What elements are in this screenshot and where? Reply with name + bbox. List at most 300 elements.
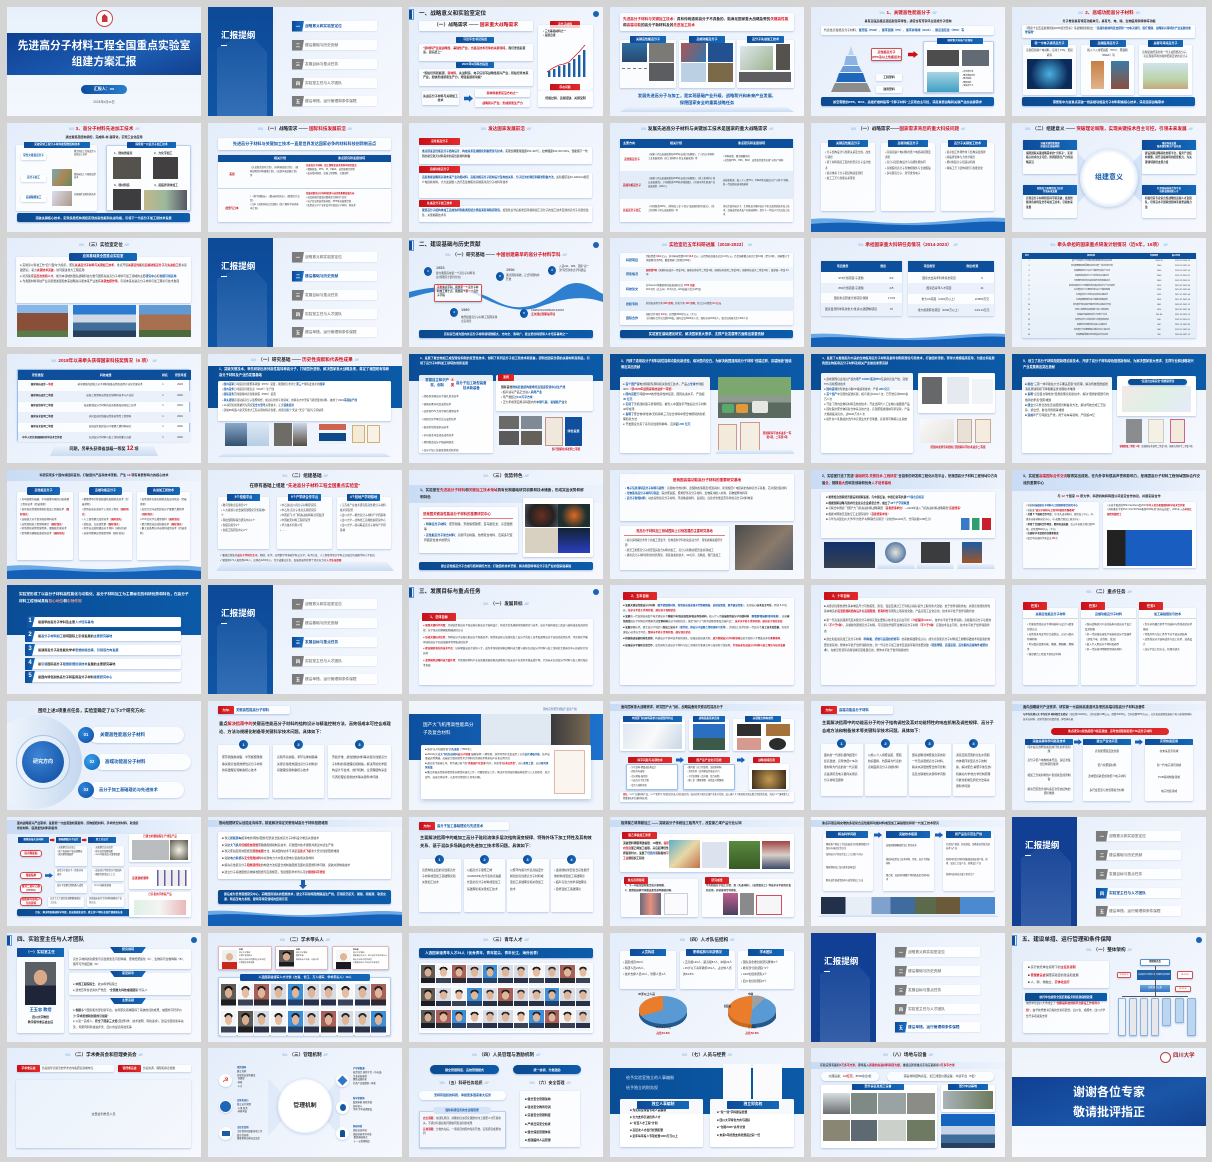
- top card: • 电子信息领域高分子材料与器件：高频电/导热材料、宽频隔热薄膜及/低损耗材、新型超低介电损耗的各种高分子基板、芯片级封装材料: [625, 487, 787, 490]
- cards: 高结构性主链的高性能高分子材料成型加工基础理论和关键加工技术: [422, 868, 456, 884]
- goals card: [620, 598, 794, 685]
- director card: 王玉忠 教授: [29, 1007, 52, 1012]
- three columns: • 医用聚芳醚酮表面修饰技术（国际领先）: [20, 532, 67, 535]
- slide 47: new processing technology: 新材料用复合材料制备级高强高韧产线，超薄、高温工艺及产业、轻薄设计产业: [946, 859, 988, 865]
- light band heading: 面向战略新兴产业需求，发展新一代血液透析膜器件、药物缓释材料、手术修合修材料、软组织修复材料、医用柔性材料和器件: [17, 821, 138, 830]
- slide 12: significance circle: 服务国家重大产业布局: [1157, 145, 1181, 148]
- slide 21: contributions 2: [409, 354, 603, 463]
- table: 1: [162, 404, 164, 407]
- slide 1: cover: [7, 7, 201, 116]
- subtitle: \\\\\ （一）发展目标 ////: [483, 601, 529, 606]
- pie chart left: [635, 991, 691, 1035]
- three columns: • 教育部重点实验室1个: [221, 504, 247, 507]
- agenda list: [292, 599, 378, 685]
- three columns: • 高强韧大分子发泡轻质材料技术: [20, 518, 57, 521]
- nodes and milestones: 1998/2003/2008/2013/2018: [531, 309, 564, 312]
- summary row with arrow: 先进高分子材料与关键加工技术: [423, 94, 458, 102]
- nodes and milestones: 3: [551, 268, 553, 272]
- right items: 产学研融通: [353, 1068, 364, 1070]
- three leader cards: [218, 946, 272, 970]
- direction 01: 关键高性能高分子材料: [100, 732, 145, 737]
- slide 6: high function polymers: 高端装备所需的新一代无卤阻燃高分子，可实现循环利用和降低碳足迹的高分子: [1142, 51, 1189, 58]
- task 2: 高端功能高分子材料: [1095, 612, 1122, 616]
- table: 1: [162, 383, 164, 386]
- left card: ● 开发了国内生物基材料及抗的技术，开发出再代人工生物心脏瓣膜产品: [824, 403, 910, 406]
- right table: 数量/经费: [966, 264, 978, 268]
- text card: ● 实验室以科技工作"四个面向"为指引，聚焦先进高分子材料与关键加工技术，重点开展关键高性能和高端功能高分子及先进加工相关基础研究，着力关键技术突破，协同促进重大工程应用: [20, 263, 187, 272]
- table: 3: [1028, 270, 1030, 272]
- nodes and milestones: 依托组建高分子材料工程国家重点实验室: [461, 316, 497, 323]
- slide 48: agenda, item four active: [1012, 817, 1206, 926]
- red pill: 重点研究以损热超低介损高透波、高导热低膨胀超低CTE高分子材料: [1068, 729, 1152, 733]
- director card: [17, 957, 64, 1033]
- table: 重点研究和发展领域: [338, 156, 365, 160]
- agenda list: 战略意义和实验室定位: [305, 602, 342, 606]
- card: • 21项研究成果被列为国家安全大型号关键技术，正式装备应用: [222, 404, 294, 407]
- org chart: [1115, 958, 1197, 1036]
- arrows: [1074, 739, 1143, 745]
- contributions card: ● 创建多个国家和省部创新平台，在科研究领域取得了系统的创新成果，被国外同行评价为"学术思想和创新的引领者": [73, 1008, 182, 1018]
- blue band: [610, 354, 804, 390]
- statement: 先进高分子材料与关键加工技术一直是世界发达国家必争的材料科技创新制高点: [233, 141, 376, 146]
- large empty card: 这里会列委员人员: [91, 1112, 116, 1116]
- left card: • 增材制造高分子微结构制造: [422, 441, 454, 444]
- slide 14: agenda, item two active: [208, 238, 402, 347]
- three columns: [218, 497, 269, 549]
- agenda side panel: 汇报提纲: [824, 956, 858, 966]
- safety card: ■ 加强临时人员管理: [525, 1138, 551, 1142]
- agenda list: 发展目标与重点任务: [305, 293, 338, 297]
- slide 31: lab characteristics: [7, 585, 201, 694]
- three columns: • 分子结构设计与性能关系及合成、改性与调控: [825, 151, 871, 159]
- slide 46: UHMWPE processing: 研究成果: [711, 878, 723, 882]
- slide 52: talent structure: • 45岁以下青年教师151人，占全体人员的64.8%: [683, 966, 732, 976]
- right card: [1117, 376, 1196, 416]
- left table: 17/33: [888, 296, 895, 300]
- slide 4: key technology overview: 高分子先进加工技术: [752, 37, 779, 41]
- three leader cards: 中国工程院院士: [239, 955, 252, 957]
- slide 56: management mechanism: [208, 1048, 402, 1157]
- problems: 存在问题: [559, 85, 571, 89]
- number badges: 1: [438, 857, 441, 862]
- org chart: 四川大学: [1181, 974, 1189, 976]
- table: • 《地平线欧洲》、《欧洲绿色协议》、《欧盟芯片法案》: [250, 196, 300, 202]
- table: • 高品质碳纤维及树脂基复合材料产业化: [306, 197, 346, 199]
- slide 26: establishing basis: • 中国航天材料工程研究所: [280, 519, 310, 522]
- left card: ■ 建立分子整合改性无卤阻燃剂制备新方法，解决传统合成工艺复杂、析出低、催化剂残留等难题: [1025, 403, 1106, 412]
- lead statement: [620, 13, 794, 31]
- slide 54: overall framework: [1012, 933, 1206, 1042]
- task 1: • 关键高性能高分子材料结构与设计与精准控制方法: [1027, 623, 1074, 631]
- needs panel: • 聚苯硫醚材料: [962, 74, 975, 76]
- light band heading: 推动阻燃研究从经验走向科学，精准解决特定关键领域高分子材料阻燃难题: [219, 821, 328, 825]
- left card: [419, 507, 518, 553]
- subtitle: \\\\\ （一）研究基础 —— 中国创建最早的高分子材料学科 ////: [445, 252, 567, 257]
- slide 54: overall framework: 依托单位提供全面后勤服务和资源保障政策: [1039, 995, 1093, 999]
- number badges: [837, 739, 846, 748]
- three columns: • 高性能耐热工程塑料聚合（国际领先）: [20, 523, 64, 526]
- title: \\\\\ 承担国家重大科研任务情况（2014-2023） ////: [858, 242, 958, 247]
- application rows: • 医用聚氨酯器件: [57, 854, 74, 856]
- left card: • 获批准"高分子材料与工程学科创新引智基地": [1026, 509, 1075, 512]
- slide 42: direction 3: 3: [526, 857, 529, 862]
- banner: 入选国家级青年人才34人（优秀青年、青年拔尖、青年长江、海外优青）: [425, 951, 540, 955]
- goals card: ■ 发展关键高性能高分子材料（聚芳硫醚类材料、新型耐高温高强丰芳族聚酰胺、高韧高阻燃、聚芳砜高性能），实现核心技术自主可控，跨域 8-10亿元，技术水平处于世界并跑、部分处于领跑状态: [623, 604, 787, 612]
- left card: 功能器件结构制造技术: [74, 194, 96, 196]
- slide 26: establishing basis: ✓ 重组后所依托高分子学科为主干，物理、化学、应用数学等基础学科交叉学，电子信息、人工智能等新兴学科交叉融合的规模学科人才队伍: [220, 554, 375, 557]
- left card: • 固相力化学聚合反应成型技术: [422, 418, 456, 421]
- slide 50: academic leaders: 高分子材料工程实验室: [353, 959, 372, 961]
- left card: 掌握自主知识产权，创制: [425, 378, 449, 387]
- agenda list: 战略意义和实验室定位: [305, 255, 342, 259]
- slide 49: lab director: 主要贡献: [122, 998, 134, 1002]
- task 3: • 特殊外场与加工条件下分子链运动结构: [1143, 633, 1187, 636]
- blue band with thanks: 敬请批评指正: [1073, 1104, 1145, 1118]
- title: \\\\\ （三）实验室定位 ////: [79, 242, 129, 247]
- right card: 3、增材制造: [114, 183, 130, 187]
- detail cards: • 定向增强-强化制: [630, 776, 647, 778]
- left card: • 联合举办国际学术会议 29 次: [1026, 537, 1058, 540]
- application rows: 聚对二氧环己酮(PPDO): [22, 885, 40, 892]
- table: 主要方向: [623, 141, 635, 145]
- blue band: [7, 585, 201, 635]
- table: 365: [1157, 334, 1161, 336]
- task 1: [1023, 608, 1078, 685]
- card: ■ 根据国家战略与国内行业龙头企业紧密合作，成立了18个产学研联盟: [826, 502, 909, 504]
- slide 36: key tasks: 任务1: [1031, 604, 1039, 608]
- table: 1894.45: [1155, 260, 1163, 262]
- table: 序号: [1025, 255, 1029, 257]
- title: \\\\\ 3、高分子材料先进加工技术 ////: [69, 126, 139, 131]
- management committee row: 负责协调、保障和审定规划: [143, 1067, 175, 1070]
- bullets card: ■ 人、财、物独立、实体化运行: [1028, 980, 1070, 984]
- agenda list: 实验室主任与人才团队: [305, 81, 342, 85]
- panel header: 入选国家级领军人才计划（杰青、长江、万人领军、学术带头人）18人: [258, 975, 352, 979]
- right table: 6: [981, 276, 983, 280]
- top card: [620, 834, 794, 872]
- agenda list: 二: [899, 968, 903, 974]
- slide 47: new processing technology: 打造新产能线、超高韧度、制备新高性能关键技术与产业: [946, 844, 990, 850]
- light band heading: 极薄聚乙烯薄膜加工 —— 突破高分子传统加工临界尺寸，改变聚乙烯产品行业认知: [621, 821, 742, 825]
- captions: [877, 564, 915, 569]
- slide 3: strategic demand: "积极培育新能源、新材料、先进制造、电子信息等战略性新兴产业，积极培育未来产业，加快形成新质生产力，增强发展新动能": [423, 71, 528, 79]
- slide 25: core technologies: • PVC力化学法增塑管材（国际领先）: [140, 518, 182, 521]
- five points: 是引领国际高分子阻燃新理论新技术发展的主要研究基地: [38, 662, 115, 666]
- light band heading: 科研实现多个国内或国际首创，打破国外产品和技术垄断，产生 18 项有重要影响力的核心技术: [40, 473, 168, 477]
- table: 高端功能高分子材料制造与技术是重要发展方向: [306, 193, 354, 195]
- three leader cards: 王琪: [239, 949, 243, 951]
- slide 52: talent structure: • 四川省创新团队8个: [741, 979, 767, 983]
- title: \\\\\ （三）管理机制 ////: [282, 1052, 328, 1057]
- blue certificate box: [565, 417, 582, 446]
- needs panel: [923, 41, 994, 93]
- flow headers: [18, 837, 116, 843]
- contributions card: ● 以第一完成人，获全了国家三大奖(自然科学、技术发明、科技进步)，建设全国创新争先奖、何梁何利科技进步奖、四川省最高科技奖等: [73, 1019, 184, 1029]
- agenda list: 一: [296, 254, 300, 260]
- slide 12: significance circle: 打造高端科技合作平台: [1157, 187, 1181, 190]
- slide 37: research directions: 研究方向: [33, 759, 53, 765]
- table: 1315: [1157, 309, 1161, 311]
- task 2: • 植入介入用高分子材料及器件: [1085, 643, 1119, 646]
- slide 11: key science problems: 高端功能高分子: [897, 141, 918, 145]
- slide 26: establishing basis: ✓ 聚组积171人规划到244人，总体达1200余人，为完成重点任务、加强发展等提供了坚实有力的人才队伍保障: [220, 559, 341, 562]
- right items: 打造产业联盟新一体化: [353, 1083, 376, 1085]
- slide 3: strategic demand: • 发展迅速: [543, 34, 555, 37]
- slide 25: core technologies: • 超临流、白高韧性聚（国际领先）: [82, 523, 121, 526]
- table: • 医用高分子产业化及可持续高分子材料、新技术: [306, 205, 356, 207]
- caption: 获国内发明专利授权 获国家科学技术进步二等奖: [930, 446, 986, 449]
- table: 国家技术发明二等奖: [31, 414, 53, 418]
- column: high performance: [620, 40, 676, 88]
- card: • 突破80吨载人航天等重大工程关键材料高性能，成果应用于"天舟""天宫"飞船与空间站等: [222, 409, 324, 412]
- arrows: [874, 832, 943, 838]
- table: 800: [1157, 324, 1161, 326]
- application rows: • 偶联性超低加工工艺: [94, 874, 115, 876]
- center circle: 管理机制: [293, 1103, 317, 1109]
- table rows: [620, 253, 793, 325]
- left card: • 获批科技部高分子材料与工程国际联合研究中心: [1026, 504, 1078, 507]
- highlight band: [811, 470, 1005, 489]
- highlight band: [1012, 470, 1206, 491]
- title: \\\\\ （一）研究基础 —— 历史性贡献和代表性成果 ////: [251, 357, 359, 362]
- slide 43: aviation needs flow: 战略领域应用: [758, 758, 775, 762]
- quote blocks: [456, 37, 494, 43]
- agenda list: 建设单措、运行管理和条件保障: [908, 1025, 960, 1029]
- left card: 微纳米加工与精密成型技术: [74, 174, 96, 179]
- red tag: 2、五年目标: [631, 594, 649, 598]
- slide 38: direction 1: 高硫环氧树脂、紧环氧烯树脂等关键高性能热固性高分子材料的基础理论和制备核心技术: [277, 755, 317, 772]
- bottom banner: [821, 97, 994, 106]
- task 1: 关键高性能高分子材料: [1035, 612, 1066, 616]
- light band heading: [610, 820, 804, 827]
- slide 2: agenda, item one active: [208, 7, 402, 116]
- agenda side panel: 汇报提纲: [221, 261, 255, 271]
- banner: 建立高性能高分子合成与结构调控方法，打破国外技术垄断，解决我国特种高分子及产业的国家级基础: [441, 564, 571, 568]
- table: 高性能聚酰亚胺薄膜及结构功能一体化材料开发: [1071, 265, 1113, 267]
- slide 52: talent structure: • 正高级123人、副高级87人、中级23人: [683, 960, 732, 964]
- red tag: [824, 592, 858, 600]
- slide 25: core technologies: • 聚烯烃中空纤维膜透析及膜制造技术（打破垄断）: [82, 498, 129, 506]
- right items: 科学家精神: [353, 1098, 364, 1100]
- column: processing: [737, 40, 794, 88]
- blue band: 给予独立的财务权: [626, 1085, 658, 1090]
- three columns: [821, 143, 875, 211]
- slide 44: direction 2: [811, 701, 1005, 810]
- right table: 41: [980, 286, 984, 290]
- right card with photo: • 国际著名学者Prof. Chul B Park教授2018年获"天府友谊奖"，2021年入选中国工程院外籍院士: [1107, 508, 1192, 516]
- photos: [824, 542, 875, 568]
- bottom banner: 航空需要的PPS、BOZ、高端纤维树脂等"卡脖子材料"上实现自主可控，满足重要战略和关键产业的关键需求: [833, 100, 982, 104]
- left items: ☭: [222, 1077, 229, 1084]
- table: 高端聚酯薄膜及绿色制造技术及应用: [1076, 334, 1108, 336]
- four cards: 保障国家关键战略需求的"卡脖子"，实现核心技术自主可控，抢抓新质生产力的战略前沿: [1026, 152, 1073, 164]
- slide 27: advantages: [409, 470, 603, 579]
- highlight band: 3、实验室高端国际合作交流取得突出成效，在内外享有很高声誉和影响力，是我国高分子材料工程领域国际合作交流的重要中心: [1023, 474, 1200, 485]
- table rows: SCI引用（近五年）13.8万次，ESI高被引论文187篇: [646, 288, 701, 291]
- slide 23: contributions 4: [811, 354, 1005, 463]
- slide 45: high frequency materials: 高性能聚酯及改性膜: [1095, 750, 1119, 753]
- agenda list: 四: [899, 1006, 903, 1012]
- table: 16: [1028, 334, 1030, 336]
- slide 25: core technologies: 高端功能高分子: [95, 488, 116, 492]
- right card: 国际首创微纳层叠结构聚烯烃高强度管道中试生产线: [501, 385, 565, 389]
- slide 12: significance circle: 实现高分子材料制造科学新突破，发展智能绿色材料及全寿命加工技术，引领未来发展: [1026, 197, 1073, 209]
- agenda side panel: [811, 933, 876, 1042]
- highlight band: 实验室现有面积2万多平方米，即将投入新建的先进材料科研大楼，重组后新增重点实验室面积积4万多平方米: [820, 1063, 955, 1067]
- certificates: [1126, 419, 1142, 443]
- slide 45: high frequency materials: 建立产业化示范: [1096, 739, 1118, 743]
- agenda list: 建设单措、运行管理和条件保障: [305, 99, 357, 103]
- right items: 聚焦成果转化: [353, 1079, 367, 1081]
- slide 52: talent structure: 职称结构与年龄情况: [693, 950, 722, 954]
- task 1: • 高性能多尺度可控合成制品、方法与面向特种材料: [1027, 633, 1074, 641]
- large empty card: [16, 1080, 191, 1148]
- application rows: • 血流动力学新型分子量结构: [94, 870, 122, 872]
- pills: 仪器设备：4.9亿元，8500余台/套: [828, 1074, 872, 1078]
- bullets card: ■ 实行依托单位领导下的主任负责制: [1028, 965, 1076, 969]
- table: 6: [1028, 285, 1030, 287]
- table: 8: [1028, 294, 1030, 296]
- table: 2021.01-2021.12: [1175, 314, 1190, 316]
- direction 01: [78, 727, 185, 744]
- agenda list: 四: [296, 80, 300, 86]
- table: 高端聚烯烃分子设计与精准合成及产业化: [1074, 270, 1110, 272]
- description: 主要解决指南中的难加工高分子链段流体多层次结构演变规律、特殊外场下加工特性及其构效关系、基于混杂多场耦合的先进加工技术等问题。具体如下：: [420, 835, 592, 848]
- title: \\\\\ （三）青年人才 ////: [483, 937, 529, 942]
- left card: [16, 145, 97, 211]
- right table: 2/3650万元: [975, 297, 989, 301]
- five points: 4: [28, 660, 32, 666]
- red tag: [422, 613, 456, 621]
- pie chart right: [724, 991, 780, 1035]
- left card: [620, 1099, 703, 1147]
- slide 22: contributions 3: [610, 354, 804, 463]
- nodes and milestones: 五次通过国家级评估: [531, 313, 555, 316]
- slide 51: young talents: [409, 933, 603, 1042]
- highlight band: [409, 485, 603, 503]
- card: ■ 与联合中国商"飞国产大飞机先进材料战略联盟（首批理事单位）—2023年进入飞机先进材料战略联盟"首席理事": [826, 507, 961, 510]
- policy card: 《国家十四五发展规划和2035远景目标》等战略规划指出："高端功能材料是支撑新一代电子通讯、医疗健康、战略新兴领域的产业发展的重要保障": [1025, 26, 1191, 34]
- table: 先进高分子加工: [623, 209, 641, 212]
- organize card: 坚持有组织的科研，承担更多国家重大任务: [434, 1093, 491, 1097]
- slide 12: significance circle: 培养卓越创新人才: [1159, 190, 1179, 193]
- table: 2021.12-2024.11: [1175, 280, 1190, 282]
- slide 49: lab director: [7, 933, 201, 1042]
- slide 11: key science problems: • 高端医用高分子生物相容性与长效服役: [885, 167, 931, 170]
- four cards: 形成自主高端材料: [1040, 145, 1060, 148]
- table: 排名: [162, 373, 168, 377]
- director card: 教学指导委员会主任: [28, 1020, 53, 1024]
- agenda side panel: [208, 585, 273, 694]
- agenda list: 四: [296, 312, 300, 316]
- left card: [1023, 502, 1099, 568]
- director card: 四川大学教授: [32, 1015, 49, 1019]
- red tag: 案例: [503, 375, 509, 379]
- number badges: [239, 740, 248, 749]
- agenda list: [292, 21, 378, 107]
- right card: ■ 四川大学特色方向与团队: [717, 1118, 750, 1122]
- slide 59: facilities and equipment: [811, 1048, 1005, 1157]
- agenda list: [1096, 831, 1182, 917]
- agenda list: 建设单措、运行管理和条件保障: [305, 677, 357, 681]
- photos: [17, 305, 68, 337]
- right caption: 占比52.8%: [745, 1031, 759, 1035]
- bottom banner: [17, 909, 141, 916]
- three leader cards: 四川大学教授: [239, 952, 250, 954]
- direction tag: 关键高性能高分子材料: [236, 708, 269, 712]
- application rows: • 低介电损耗介质高频聚硅: [57, 851, 82, 853]
- blue band: 给予实验室独立的人事编制: [626, 1075, 674, 1080]
- slide 6: high function polymers: [1012, 7, 1206, 116]
- table: 1: [162, 414, 164, 418]
- highlight band: 1、实验室在先进高分子材料和关键加工技术领域具有长期基础研究积累和技术储备，形成突出优势和鲜明特色: [420, 488, 584, 499]
- slide 43: aviation needs flow: 关键聚合物构成件: [753, 717, 773, 720]
- left items: ·人事·财务: [237, 1108, 248, 1110]
- right items: ·十一五管理制度: [353, 1141, 370, 1143]
- bottom left card: 2、超薄低损耗可穿戴高柔性透明基底材料。: [625, 889, 674, 892]
- direction 02: 高端功能高分子材料: [105, 759, 146, 764]
- slide 26: establishing basis: • ……: [280, 529, 287, 532]
- leader group panel: [218, 977, 391, 1036]
- cards: 面向新一代通信器件超低介损高透波、高导热低CTE功能材料为代表的新一代高频高速通讯及电子器件关键高分子材料及器件: [824, 753, 858, 782]
- left table: 863计划项目/子课题: [838, 286, 864, 290]
- top caption: 国内首条聚芳硫醚产品生产线: [543, 708, 577, 711]
- five points: [25, 616, 182, 684]
- slide 12: significance circle: 强化科技支撑: [1162, 142, 1176, 145]
- table: 2600: [1157, 280, 1161, 282]
- pills: [821, 1072, 879, 1081]
- agenda list: 发展目标与重点任务: [305, 62, 338, 66]
- right table: 重大成果转化项目（1000万以上）: [918, 308, 960, 312]
- subtitle: 与 12 个国家 31 所大学、科研机构和跨国公司签定合作协议，并展实质合作: [1057, 494, 1161, 498]
- slide 42: direction 3: 4: [570, 857, 573, 862]
- left table: 6/2: [890, 276, 893, 280]
- slide 50: academic leaders: 教育部长江学者、万里计划: [296, 959, 319, 961]
- slide 3: strategic demand: • 三大基础材料之一: [543, 30, 566, 33]
- application rows: • 无菌聚合反应加工: [57, 847, 76, 849]
- slide 43: aviation needs flow: • 聚三茶（聚聚基聚、树脂及可增聚基）: [687, 780, 726, 782]
- light band heading: [1012, 704, 1206, 711]
- table: 高频低损耗高分子介电材料及关键技术: [1075, 275, 1109, 277]
- table: 1: [162, 394, 164, 396]
- slide 11: key science problems: 高分子关键加工技术: [954, 141, 981, 145]
- slide 36: key tasks: 任务2: [1089, 604, 1097, 608]
- left card: 高端精细加工: [26, 196, 41, 199]
- slide 58: personnel and funds: 独立财务权: [744, 1102, 762, 1106]
- left card: • 承接了全国际合作项目，取得突出成果：近五年来联合项目超20项，总经费8660万元（半万）: [1026, 523, 1095, 531]
- left card: ● 开发国家急需了系列高性能特种料，应用超 200 亿元: [623, 422, 690, 426]
- card: ■ 根据中国航天及航空工业部院领导（首批理事单位）: [826, 512, 890, 516]
- detail cards: • 与加压分子复合物: [630, 780, 649, 782]
- slide 33: overall goals: [409, 585, 603, 694]
- pill label: [433, 1107, 491, 1114]
- slide 29: full chain platform: [811, 470, 1005, 579]
- pills: [430, 1065, 499, 1074]
- section heading: 一、战略意义和实验室定位: [419, 11, 486, 17]
- table: 获奖年度: [175, 373, 187, 377]
- banner: 突破关键核心技术，实现多层结构调控实现的高性能和先进功能，引领下一代高分子加工新技术发展: [35, 216, 172, 220]
- table: [1022, 253, 1196, 338]
- needs panel: • 高性能纤维: [962, 71, 973, 73]
- columns: 结构高分子多层次加工工艺调控与评价: [826, 854, 863, 856]
- agenda list: 建设基础与历史贡献: [908, 969, 941, 973]
- honors card: ● 中国工程院院士，欧洲科学院院士: [73, 982, 117, 986]
- banner: 建设成为世界阻燃研究中心，前瞻国际领先的阻燃技术，建立不同领域阻燃精品生产线，实现航空航天、舰船、新能源、轨道交通、特高压电力系统、建筑等特定领域的应用示范: [224, 892, 386, 901]
- task 2: • 新一代高端可降解医用绿色材料: [1085, 648, 1122, 651]
- slide 6: high function polymers: 分子骨架具有特定功能单元，具有光、电、磁、生物医用和特种等功能: [1062, 19, 1156, 23]
- slide 43: aviation needs flow: 中国第飞机材料需求对关键部件特点: [632, 717, 673, 720]
- right card with photo: [1103, 502, 1196, 568]
